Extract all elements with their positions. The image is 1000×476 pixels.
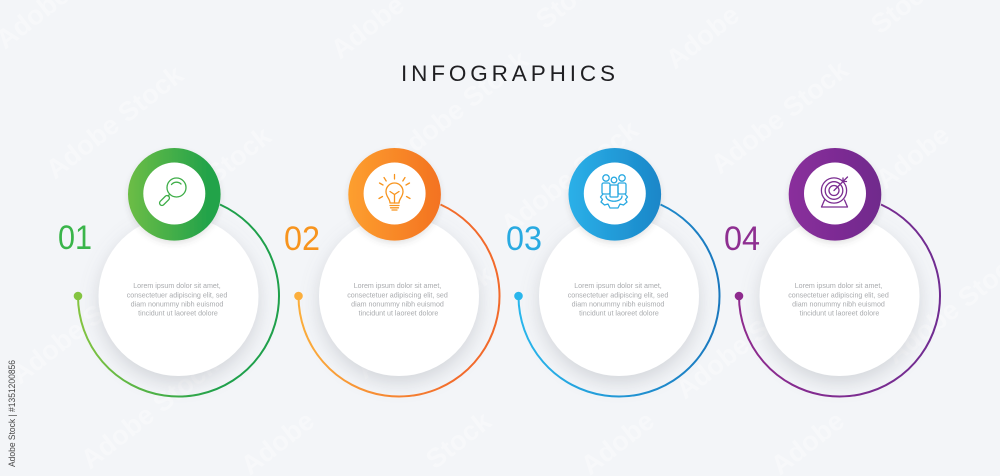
panel: step 2 white circle [319,216,479,376]
badge: step 3 [568,148,661,241]
number: 02: 02 [284,220,320,258]
step 1 [58,148,279,397]
stock id side text: Adobe Stock | #1351200856 [7,360,17,467]
number: 04: 04 [724,220,760,258]
step 4 [724,148,940,397]
watermark pattern: Adobe Stock [385,44,535,170]
watermark pattern: Adobe Stock [350,259,500,385]
panel: step 3 white circle [539,216,699,376]
arc: step 3 [518,204,720,397]
text: step 3 body: tincidunt ut laoreet dolore [579,309,659,317]
text: step 3 body: Lorem ipsum dolor sit amet, [574,282,662,290]
text: step 4 body: tincidunt ut laoreet dolore [800,309,879,317]
text: step 1 body: consectetuer adipiscing elit, sed [127,291,227,299]
step 2 [284,148,500,397]
watermark pattern: Adobe Stock [5,264,155,390]
text: step 4 body: consectetuer adipiscing elit, sed [788,291,889,299]
badge: step 2 [348,148,441,241]
watermark pattern: Stock [420,405,497,475]
arc dot: step 2 [294,292,303,300]
arc dot: step 3 [514,292,523,300]
badge inner: step 4 [804,162,866,224]
text: step 2 body: tincidunt ut laoreet dolore [359,309,438,317]
text: step 2 body: consectetuer adipiscing elit, sed [347,291,448,299]
arc: step 1 [78,204,279,397]
watermark pattern: Adobe Stock [670,279,820,405]
watermark pattern: Stock [200,120,277,190]
panel: step 4 white circle [760,216,920,376]
icon: target [821,177,848,207]
watermark pattern: Adobe [870,119,955,195]
step 3 [506,148,720,397]
watermark pattern: Adobe Stock [40,59,190,185]
badge: step 1 [128,148,221,241]
text: step 3 body: consectetuer adipiscing elit, sed [568,291,668,299]
icon: magnifier [159,178,186,206]
text: step 4 body: Lorem ipsum dolor sit amet, [795,282,882,290]
title: INFOGRAPHICS [401,61,615,86]
arc dot: step 1 [74,292,82,300]
text: step 4 body: diam nonummy nibh euismod [792,300,885,308]
watermark pattern: Adobe Stock [495,114,645,240]
text: step 2 body: Lorem ipsum dolor sit amet, [354,282,441,290]
text: step 1 body: diam nonummy nibh euismod [131,300,223,308]
badge: step 4 [789,148,881,241]
text: step 1 body: tincidunt ut laoreet dolore [138,309,218,317]
badge inner: step 3 [584,162,646,224]
text: step 2 body: diam nonummy nibh euismod [351,300,444,308]
arc dot: step 4 [735,292,743,300]
number: 01: 01 [58,219,92,257]
number: 03: 03 [506,220,542,258]
badge inner: step 2 [364,162,426,224]
text: step 1 body: Lorem ipsum dolor sit amet, [133,282,221,290]
arc: step 2 [298,204,500,397]
watermark pattern: Adobe Stock [705,54,855,180]
icon: team and gear [600,175,628,208]
icon: light bulb [379,174,410,210]
badge inner: step 1 [143,162,205,224]
watermark pattern: Adobe [660,0,745,75]
text: step 3 body: diam nonummy nibh euismod [572,300,664,308]
arc: step 4 [739,204,940,397]
panel: step 1 white circle [98,216,258,376]
watermark pattern: Adobe Stock [75,349,225,475]
